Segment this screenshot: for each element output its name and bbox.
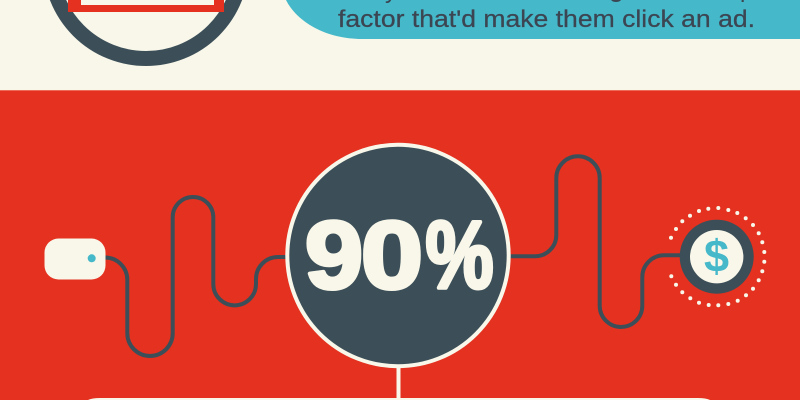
dotted ring bbox=[669, 206, 766, 307]
cropped upper text line bbox=[385, 0, 753, 4]
big number: 9 bbox=[305, 202, 363, 309]
arrow: right cable from circle to coin bbox=[506, 156, 685, 327]
icon: cropped ring with red screen bbox=[50, 0, 242, 58]
callout text: factor that'd make them click an ad. bbox=[338, 6, 755, 33]
big number bbox=[305, 202, 494, 309]
dollar sign: $ bbox=[704, 230, 729, 282]
callout: teal speech bubble bbox=[286, 0, 800, 39]
panel: cropped bottom card bbox=[88, 398, 710, 400]
arrow: left cable from mouse to circle bbox=[105, 197, 290, 356]
stat circle: 90% bbox=[287, 145, 509, 366]
icon: computer mouse bbox=[44, 238, 106, 280]
icon: dollar coin with dotted ring bbox=[669, 206, 766, 307]
big number: % bbox=[426, 202, 494, 309]
panel: red background bbox=[0, 90, 800, 400]
connector line to bottom panel bbox=[396, 366, 400, 400]
big number: 0 bbox=[361, 202, 423, 309]
